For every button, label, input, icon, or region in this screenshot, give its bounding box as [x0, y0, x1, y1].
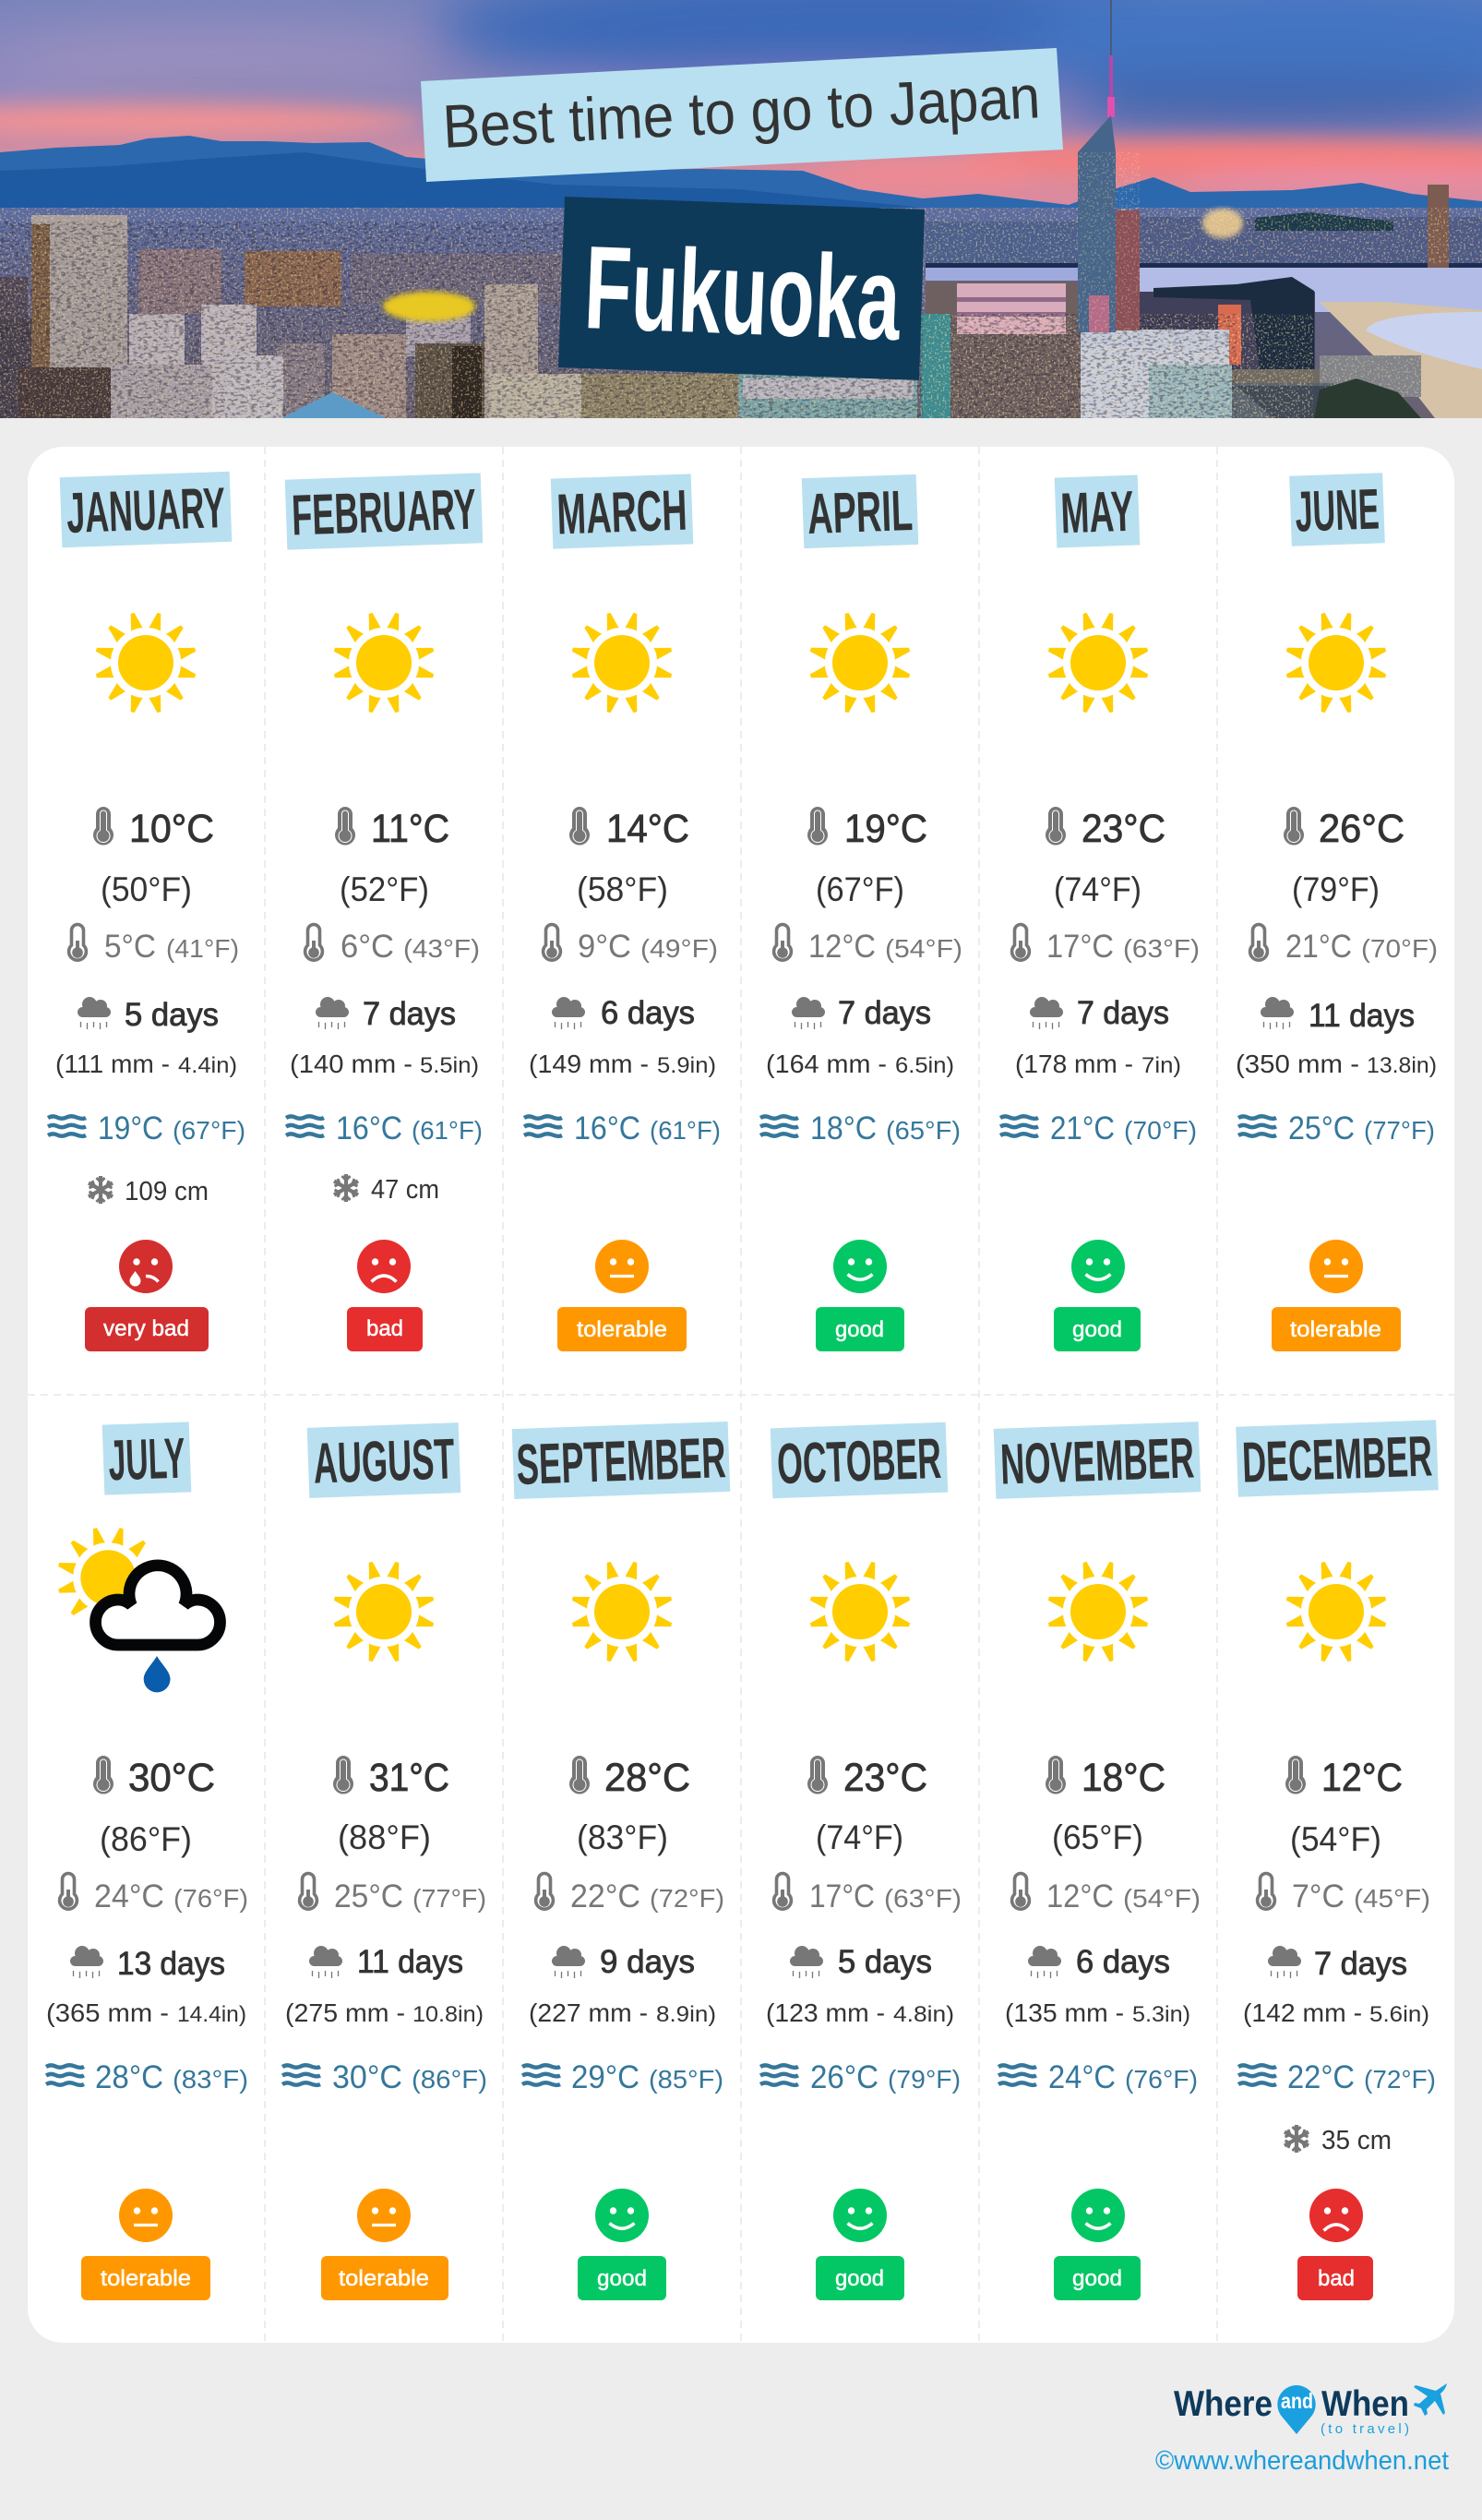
high temperature in Fahrenheit: (67°F) [816, 870, 904, 908]
rainfall amount: 8.9in) [656, 2002, 716, 2027]
icon: plane [1414, 2383, 1447, 2416]
logo: Where and When: When [1321, 2384, 1409, 2424]
rainy days [552, 995, 695, 1031]
rainy days: 7 days [363, 996, 456, 1032]
month label: August [307, 1422, 460, 1498]
panel: June [1236, 473, 1438, 1351]
high temperature: 26°C [1319, 807, 1404, 851]
rainfall amount: (227 mm - [529, 1998, 648, 2027]
high temperature: 18°C [1082, 1756, 1165, 1800]
sea temperature: (70°F) [1124, 1116, 1197, 1145]
panel: August [282, 1422, 487, 2300]
month label: October: OCTOBER [776, 1427, 942, 1496]
rainfall amount [529, 1050, 716, 1078]
low temperature [1012, 925, 1200, 965]
rainfall amount: (149 mm - [529, 1050, 649, 1078]
rainy days [309, 1944, 463, 1980]
icon: sun [1047, 1561, 1149, 1662]
sea temperature: (61°F) [412, 1116, 483, 1145]
high temperature in Fahrenheit: (83°F) [577, 1818, 668, 1856]
sea temperature [760, 1110, 961, 1146]
rating badge: good [1054, 2256, 1141, 2300]
rainfall amount [46, 1998, 246, 2027]
rainy days: 11 days [357, 1944, 463, 1980]
rainy days: 13 days [117, 1946, 225, 1982]
high temperature [1285, 1756, 1403, 1800]
high temperature [569, 807, 689, 851]
icon: sun behind rain cloud [57, 1527, 221, 1692]
rainy days [1028, 1944, 1170, 1980]
icon: sun [1047, 612, 1149, 714]
rainy days: 11 days [1309, 998, 1415, 1034]
month label: March: MARCH [556, 479, 688, 546]
low temperature: 6°C [341, 929, 394, 965]
sea temperature: 19°C [98, 1110, 163, 1146]
sea temperature: (79°F) [888, 2065, 961, 2094]
sea temperature: 29°C [571, 2059, 639, 2095]
rainfall amount: (164 mm - [766, 1050, 887, 1078]
title label: Best time to go to Japan [441, 62, 1042, 161]
low temperature: (63°F) [1123, 934, 1200, 963]
snowfall [334, 1174, 439, 1205]
high temperature [1046, 807, 1165, 851]
rating badge: good [816, 1307, 904, 1351]
rainfall amount [285, 1998, 484, 2027]
month label: June [1289, 473, 1385, 546]
sea temperature: 30°C [332, 2059, 402, 2095]
rainfall amount [529, 1998, 716, 2027]
rating badge: very bad [85, 1307, 209, 1351]
high temperature: 30°C [128, 1756, 215, 1800]
low temperature [300, 1874, 486, 1914]
low temperature: (72°F) [650, 1884, 724, 1913]
sea temperature: 28°C [95, 2059, 163, 2095]
darker window mottling over the city [0, 222, 923, 418]
rainy days: 6 days [1076, 1944, 1170, 1980]
sea temperature: (61°F) [650, 1116, 721, 1145]
high temperature in Fahrenheit: (50°F) [101, 870, 192, 908]
rating face: tolerable [595, 1240, 649, 1293]
website credit: ©www.whereandwhen.net [1155, 2446, 1449, 2476]
rating badge: good [578, 2256, 666, 2300]
snowfall: 35 cm [1321, 2126, 1392, 2155]
low temperature: (49°F) [640, 934, 718, 963]
rainy days: 5 days [838, 1944, 932, 1980]
low temperature: 12°C [808, 929, 876, 965]
rating badge: very bad: very bad [103, 1316, 189, 1341]
high temperature [1046, 1756, 1165, 1800]
sea temperature: (83°F) [173, 2065, 248, 2094]
snowfall: 47 cm [371, 1175, 439, 1205]
low temperature [774, 925, 962, 965]
high temperature in Fahrenheit: (52°F) [340, 870, 429, 908]
rating badge: tolerable [557, 1307, 687, 1351]
high temperature: 23°C [1082, 807, 1165, 851]
rating face: good [1071, 1240, 1125, 1293]
sea temperature: 24°C [1048, 2059, 1116, 2095]
sea temperature: 26°C [810, 2059, 878, 2095]
high temperature: 28°C [604, 1756, 690, 1800]
rating badge: good [1054, 1307, 1141, 1351]
rainfall amount: 6.5in) [895, 1053, 954, 1078]
sea temperature [48, 1110, 245, 1146]
low temperature [536, 1874, 724, 1914]
month label: January: JANUARY [66, 476, 226, 546]
high temperature in Fahrenheit: (88°F) [338, 1818, 431, 1856]
rainy days [70, 1946, 225, 1982]
sea temperature: 25°C [1288, 1110, 1355, 1146]
rainfall amount: 4.8in) [893, 2002, 954, 2027]
rainfall amount: (140 mm - [290, 1050, 412, 1078]
rainfall amount: (350 mm - [1236, 1050, 1359, 1078]
icon: sun [333, 612, 435, 714]
calendar card [28, 447, 1454, 2343]
rainfall amount: 13.8in) [1367, 1053, 1437, 1078]
low temperature [305, 925, 480, 965]
low temperature: 21°C [1285, 929, 1352, 965]
sea temperature: (67°F) [173, 1116, 245, 1145]
icon: sun [333, 1561, 435, 1662]
rainfall amount: (275 mm - [285, 1998, 405, 2027]
sea temperature [1000, 1110, 1197, 1146]
month label: April: APRIL [807, 479, 914, 546]
icon: sun [571, 1561, 673, 1662]
rainfall amount [55, 1050, 237, 1078]
low temperature: 17°C [1046, 929, 1114, 965]
rainfall amount [766, 1998, 954, 2027]
panel: April [760, 474, 962, 1351]
high temperature in Fahrenheit: (86°F) [100, 1820, 192, 1858]
rainfall amount: 4.4in) [178, 1053, 237, 1078]
rating face: tolerable [357, 2189, 411, 2242]
month label: March [551, 474, 693, 549]
rating face: bad [1309, 2189, 1363, 2242]
sea temperature [760, 2059, 961, 2095]
rating badge: tolerable: tolerable [1290, 1317, 1381, 1342]
snowfall [1285, 2125, 1392, 2155]
sea temperature: 16°C [336, 1110, 402, 1146]
rainy days [78, 997, 219, 1033]
low temperature: 12°C [1046, 1878, 1114, 1914]
low temperature [1250, 925, 1438, 965]
panel: March [524, 474, 721, 1351]
rating badge: good: good [835, 1317, 884, 1342]
month label: August: AUGUST [312, 1427, 456, 1496]
city name label: Fukuoka [582, 222, 903, 366]
sea temperature: 22°C [1287, 2059, 1355, 2095]
icon: sun [95, 612, 197, 714]
high temperature in Fahrenheit: (74°F) [816, 1818, 903, 1856]
rainy days: 5 days [125, 997, 219, 1033]
icon: sun [809, 612, 911, 714]
snowfall: 109 cm [125, 1177, 209, 1206]
rainfall amount [1005, 1998, 1190, 2027]
low temperature: (41°F) [166, 934, 239, 963]
sea temperature [282, 2059, 487, 2095]
high temperature in Fahrenheit: (54°F) [1290, 1820, 1381, 1858]
high temperature [93, 807, 214, 851]
low temperature [544, 925, 718, 965]
rating face: tolerable [1309, 1240, 1363, 1293]
rating badge: tolerable [81, 2256, 210, 2300]
panel: February [285, 473, 483, 1351]
city name label [558, 197, 925, 380]
rainy days [792, 995, 931, 1031]
month label: June: JUNE [1294, 477, 1380, 545]
low temperature [774, 1874, 962, 1914]
sea temperature: (77°F) [1364, 1116, 1435, 1145]
low temperature [1258, 1874, 1430, 1914]
logo: Where and When [1174, 2383, 1447, 2437]
panel: September [512, 1422, 730, 2300]
rating face: good [1071, 2189, 1125, 2242]
icon: sun [1285, 612, 1387, 714]
month label: May [1055, 474, 1140, 548]
rating badge: good: good [835, 2266, 884, 2291]
sea temperature: (65°F) [886, 1116, 961, 1145]
logo: Where and When: (to travel) [1321, 2421, 1409, 2437]
high temperature [807, 807, 927, 851]
rainfall amount: 14.4in) [177, 2002, 246, 2027]
low temperature: (63°F) [884, 1884, 962, 1913]
low temperature [60, 1874, 248, 1914]
rainy days [1261, 997, 1415, 1034]
high temperature [569, 1756, 690, 1800]
icon: sun [1285, 1561, 1387, 1662]
month label: February: FEBRUARY [291, 478, 477, 547]
header photo: Fukuoka skyline at dusk [0, 0, 1482, 418]
rating face: very bad [119, 1240, 173, 1293]
high temperature: 14°C [606, 807, 689, 851]
sea temperature: (76°F) [1125, 2065, 1198, 2094]
rainfall amount: (142 mm - [1243, 1998, 1362, 2027]
sea temperature [1238, 1110, 1435, 1146]
rating face: good [595, 2189, 649, 2242]
rating badge: good: good [1072, 1317, 1122, 1342]
snowfall [89, 1176, 209, 1206]
rating badge: tolerable: tolerable [339, 2266, 429, 2291]
month label: February [285, 473, 483, 550]
rainfall amount: 7in) [1141, 1053, 1181, 1078]
high temperature [333, 1756, 449, 1800]
sea temperature [998, 2059, 1198, 2095]
rating face: good [833, 1240, 887, 1293]
rainfall amount [766, 1050, 954, 1078]
low temperature: (70°F) [1361, 934, 1438, 963]
low temperature: 9°C [578, 929, 631, 965]
month label: January [60, 472, 232, 547]
month label: July: JULY [107, 1427, 186, 1493]
sea temperature: 16°C [574, 1110, 640, 1146]
high temperature in Fahrenheit: (79°F) [1292, 870, 1380, 908]
low temperature: 24°C [94, 1878, 164, 1914]
rating badge: bad: bad [1318, 2266, 1355, 2291]
month label: April [802, 474, 918, 548]
low temperature: (43°F) [403, 934, 480, 963]
panel: January [48, 472, 245, 1351]
rainfall amount: (178 mm - [1015, 1050, 1133, 1078]
rainy days: 9 days [600, 1944, 695, 1980]
icon: sun [809, 1561, 911, 1662]
sea temperature [522, 2059, 723, 2095]
low temperature: (76°F) [173, 1884, 248, 1913]
rainfall amount: 10.8in) [412, 2002, 484, 2027]
low temperature: (54°F) [885, 934, 962, 963]
rainfall amount: (123 mm - [766, 1998, 885, 2027]
month label: May: MAY [1059, 480, 1135, 546]
sea temperature [1238, 2059, 1436, 2095]
logo: Where and When: and [1281, 2389, 1313, 2413]
rating face: bad [357, 1240, 411, 1293]
low temperature: 17°C [809, 1878, 875, 1914]
low temperature: 22°C [570, 1878, 640, 1914]
sea temperature: 18°C [810, 1110, 877, 1146]
month label: July [102, 1422, 191, 1495]
low temperature: (45°F) [1354, 1884, 1430, 1913]
rating badge: good: good [1072, 2266, 1122, 2291]
rating face: good [833, 2189, 887, 2242]
rating badge: tolerable [1272, 1307, 1401, 1351]
high temperature: 12°C [1321, 1756, 1403, 1800]
high temperature [1284, 807, 1404, 851]
rainfall amount: (111 mm - [55, 1050, 170, 1078]
rainfall amount: 5.6in) [1369, 2002, 1429, 2027]
panel: July [46, 1422, 248, 2300]
high temperature: 10°C [129, 807, 214, 851]
rainfall amount: (365 mm - [46, 1998, 169, 2027]
rainfall amount: 5.5in) [420, 1053, 479, 1078]
rating badge: bad [347, 1307, 423, 1351]
rating badge: tolerable [321, 2256, 448, 2300]
high temperature: 11°C [371, 807, 449, 851]
rainfall amount: 5.3in) [1132, 2002, 1190, 2027]
rainy days [1268, 1946, 1407, 1982]
sea temperature: (72°F) [1364, 2065, 1436, 2094]
panel: May [1000, 474, 1200, 1351]
rating badge: good: good [597, 2266, 647, 2291]
panel: December [1236, 1420, 1439, 2300]
sea temperature: 21°C [1050, 1110, 1115, 1146]
sea temperature: (86°F) [412, 2065, 487, 2094]
rating badge: bad [1297, 2256, 1373, 2300]
sea temperature [46, 2059, 248, 2095]
high temperature in Fahrenheit: (58°F) [577, 870, 668, 908]
sea temperature: (85°F) [649, 2065, 723, 2094]
sea temperature [286, 1110, 483, 1146]
high temperature in Fahrenheit: (74°F) [1054, 870, 1141, 908]
low temperature: 7°C [1292, 1878, 1345, 1914]
rainfall amount: 5.9in) [657, 1053, 716, 1078]
low temperature: 25°C [334, 1878, 403, 1914]
rainfall amount: (135 mm - [1005, 1998, 1124, 2027]
low temperature: (54°F) [1123, 1884, 1201, 1913]
month label: November [994, 1422, 1201, 1499]
logo: Where and When: Where [1174, 2384, 1273, 2424]
month label: November: NOVEMBER [999, 1426, 1195, 1497]
low temperature [69, 925, 239, 965]
rainy days: 7 days [1077, 995, 1169, 1031]
month label: October [771, 1422, 948, 1498]
high temperature: 31°C [369, 1756, 449, 1800]
rainfall amount [1243, 1998, 1429, 2027]
rating badge: bad: bad [366, 1316, 403, 1341]
city lights [0, 208, 926, 418]
month label: September [512, 1422, 730, 1499]
high temperature: 19°C [844, 807, 927, 851]
rating badge: good [816, 2256, 904, 2300]
high temperature: 23°C [843, 1756, 927, 1800]
rainfall amount [290, 1050, 479, 1078]
rainy days: 6 days [601, 995, 695, 1031]
rainfall amount [1236, 1050, 1437, 1078]
sea temperature [524, 1110, 721, 1146]
rainy days [790, 1944, 932, 1980]
rating badge: tolerable: tolerable [577, 1317, 667, 1342]
low temperature [1012, 1874, 1201, 1914]
low temperature: 5°C [104, 929, 156, 965]
rainy days [552, 1944, 695, 1980]
rainy days: 7 days [838, 995, 931, 1031]
high temperature [807, 1756, 927, 1800]
panel: November [994, 1422, 1201, 2300]
month label: September: SEPTEMBER [515, 1426, 727, 1497]
rainy days: 7 days [1314, 1946, 1407, 1982]
rainy days [1030, 995, 1169, 1031]
panel: October [760, 1422, 962, 2300]
high temperature [335, 807, 449, 851]
rating face: tolerable [119, 2189, 173, 2242]
rainy days [316, 996, 456, 1032]
icon: sun [571, 612, 673, 714]
rating badge: tolerable: tolerable [101, 2266, 191, 2291]
low temperature: (77°F) [412, 1884, 486, 1913]
high temperature in Fahrenheit: (65°F) [1052, 1818, 1143, 1856]
